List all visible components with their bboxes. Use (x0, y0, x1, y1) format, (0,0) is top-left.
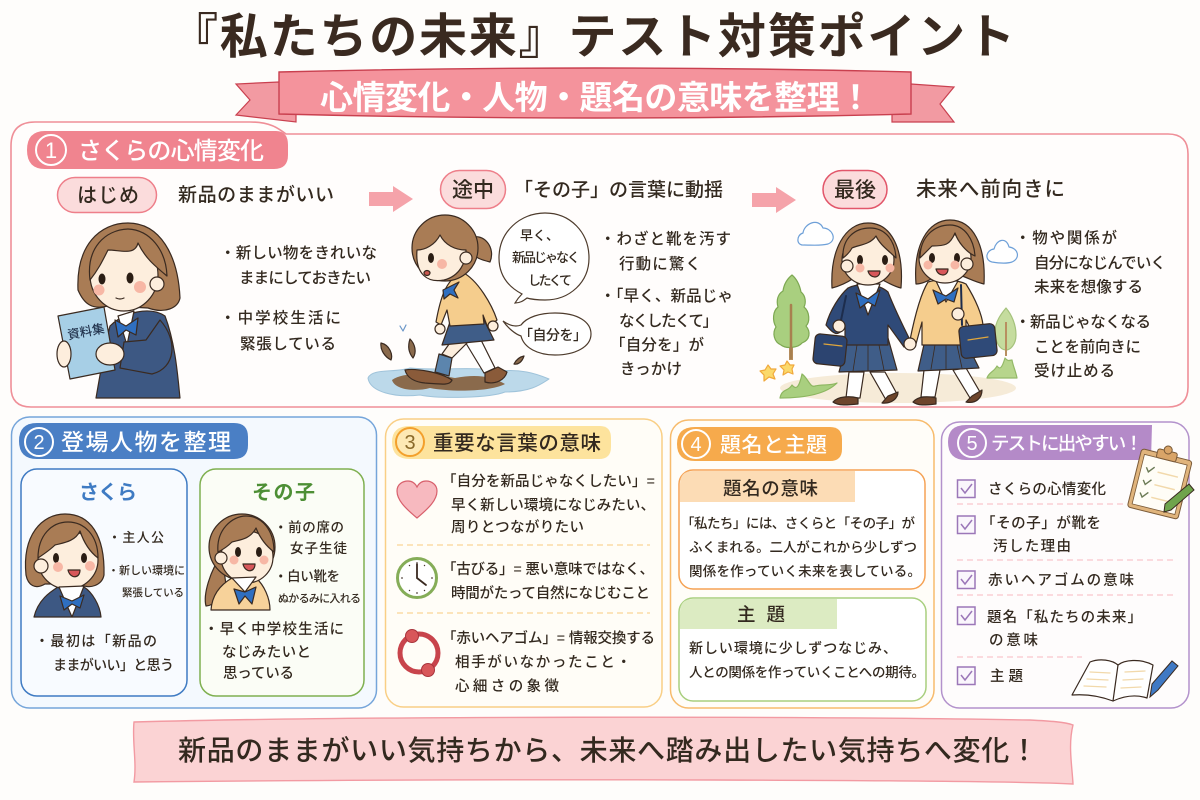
text: その子 details: ・白い靴を (274, 568, 340, 584)
section heading 2 (19, 423, 248, 459)
icon: blue pen (1150, 661, 1178, 697)
stage heading: 「その子」の言葉に動揺: 「その子」の言葉に動揺 (514, 179, 723, 201)
section heading 2: 2 (33, 432, 45, 454)
panel 3: 重要な言葉の意味 (386, 419, 662, 707)
speech bubble: 早く、新品じゃなくしたくて: 新品じゃなく (512, 250, 580, 265)
stage label: 最後 (823, 170, 887, 208)
item: 題名の意味 (958, 607, 1142, 649)
card: 題名の意味: 題名の意味 (723, 478, 818, 499)
card: さくら (21, 469, 187, 696)
icon: heart (397, 481, 437, 518)
banner: subtitle ribbon (236, 68, 954, 122)
section heading 5 (948, 425, 1152, 460)
text: 途中 bullets (600, 229, 733, 378)
text: 最後 bullets: ・物や関係が (1015, 228, 1117, 247)
text: 主題の説明 (689, 640, 925, 680)
text: さくら details: ・主人公 (108, 530, 164, 545)
text: 自分を新品じゃなくしたい: 早く新しい環境になじみたい、 (451, 497, 655, 514)
text: 自分を新品じゃなくしたい: 「自分を新品じゃなくしたい」= (442, 473, 655, 490)
text: 途中 bullets: ・「早く、新品じゃ (600, 287, 733, 305)
card: 主題: 主 題 (737, 604, 785, 625)
stage label: はじめ: はじめ (77, 185, 139, 207)
icon: green pencil (1164, 484, 1194, 512)
text: その子 details: ・早く中学校生活に (204, 621, 344, 638)
name: さくら: さくら (79, 481, 137, 504)
text: その子 details: 女子生徒 (290, 541, 348, 556)
stage label: はじめ (58, 178, 156, 212)
text: 赤いヘアゴム: 「赤いヘアゴム」= 情報交換する (442, 629, 655, 647)
section heading 3: 3 (404, 432, 416, 454)
stage heading: 新品のままがいい: 新品のままがいい (178, 184, 334, 206)
panel 4: 題名と主題 (670, 420, 934, 708)
panel 2: 登場人物を整理 (12, 417, 376, 708)
text: 自分を新品じゃなくしたい: 周りとつながりたい (451, 518, 584, 536)
banner: subtitle ribbon: 心情変化・人物・題名の意味を整理！ (320, 79, 872, 116)
text: さくら details: 緊張している (122, 587, 184, 599)
illustration: two girls walking with scenery (760, 220, 1017, 405)
title: 『私たちの未来』テスト対策ポイント (170, 11, 1015, 64)
text: 題名の説明: 関係を作っていく未来を表している。 (689, 563, 921, 579)
stage heading: 未来へ前向きに: 未来へ前向きに (916, 178, 1065, 201)
stage label: 途中 (440, 170, 506, 208)
text: その子 details: 思っている (223, 665, 294, 682)
header: 題名の意味 (680, 471, 855, 502)
stage label: 途中: 途中 (452, 179, 494, 202)
bag left (813, 333, 847, 367)
section heading 4 (677, 427, 842, 461)
stage label: 最後: 最後 (834, 179, 876, 202)
text: 赤いヘアゴム: 心細さの象徴 (455, 677, 560, 695)
text: 自分を新品じゃなくしたい (442, 473, 655, 536)
section heading 4: 題名と主題 (720, 434, 827, 457)
text: さくら details: ・新しい環境に (108, 564, 185, 577)
text: 主題の説明: 人との関係を作っていくことへの期待。 (689, 665, 925, 680)
text: 途中 bullets: ・わざと靴を汚す (600, 229, 731, 248)
callout: summary banner (134, 717, 1073, 784)
icon: clock (398, 558, 436, 598)
header: 主題 (680, 599, 837, 629)
text: 最後 bullets: ・新品じゃなくなる (1015, 313, 1151, 331)
card: 主題 (679, 598, 926, 701)
bag right (958, 323, 998, 359)
section heading 1: さくらの心情変化 (78, 138, 264, 165)
text: その子 details (204, 519, 361, 682)
text: 古びる (442, 561, 654, 602)
text: 題名の説明: ふくまれる。二人がこれから少しずつ (689, 539, 917, 555)
section heading 5: 5 (966, 433, 978, 455)
text: 途中 bullets: 「自分を」が (610, 335, 704, 354)
section heading 2: 登場人物を整理 (61, 429, 231, 455)
text: 途中 bullets: 行動に驚く (619, 255, 701, 273)
icon: red hair tie (400, 630, 438, 676)
speech bubble: 早く、新品じゃなくしたくて: したくて (528, 273, 572, 288)
text: さくら details: ままがいい」と思う (53, 657, 174, 673)
text: 最後 bullets: 自分になじんでいく (1034, 254, 1166, 272)
item: 赤いヘアゴムの意味: 赤いヘアゴムの意味 (988, 571, 1134, 589)
speech bubble: 「自分を」: 「自分を」 (519, 327, 587, 343)
illustration: さくら holding a book (57, 223, 180, 398)
section heading 5: テストに出やすい！ (991, 433, 1143, 454)
text: 途中 bullets: なくしたくて」 (619, 312, 718, 330)
item: 主題 (958, 667, 1024, 685)
section heading 1 (27, 131, 288, 169)
cloud right (987, 240, 1017, 263)
text: はじめ bullets (220, 244, 377, 353)
sleeve (120, 320, 172, 374)
card: その子 (200, 469, 364, 696)
text: さくら details (35, 530, 185, 673)
item: その子が靴を汚した理由: 汚した理由 (993, 538, 1071, 555)
speech bubble: 早く、新品じゃなくしたくて: 早く、 (520, 228, 559, 243)
section heading 1: 1 (45, 138, 57, 163)
text: その子 details: なじみたいと (222, 644, 311, 661)
text: 題名の説明 (681, 515, 921, 579)
item: その子が靴を汚した理由 (958, 514, 1101, 555)
item: その子が靴を汚した理由: 「その子」が靴を (981, 514, 1101, 532)
arrow: 途中 to 最後 (752, 187, 796, 213)
item: さくらの心情変化: さくらの心情変化 (988, 481, 1106, 498)
text: 古びる: 「古びる」= 悪い意味ではなく、 (442, 561, 654, 578)
item: 題名の意味: 題名「私たちの未来」 (987, 609, 1142, 626)
panel 5: テストに出やすい (942, 422, 1194, 708)
checklist (957, 480, 1175, 685)
text: はじめ bullets: ・新しい物をきれいな (220, 244, 377, 262)
section heading 4: 4 (690, 434, 702, 456)
cloud left (798, 222, 833, 245)
illustration: puddle and walking girl (368, 215, 549, 397)
section heading 3: 重要な言葉の意味 (433, 432, 601, 455)
text: 題名の説明: 「私たち」には、さくらと「その子」が (681, 515, 916, 531)
illustration: さくら holding a book: 資料集 (66, 320, 106, 342)
name: その子: その子 (252, 482, 315, 504)
speech bubble: 早く、新品じゃなくしたくて (499, 213, 589, 303)
girl left (blazer) (813, 223, 911, 405)
item: 主題: 主題 (990, 668, 1024, 685)
girl right (cardigan) (910, 220, 998, 405)
portrait: さくら (25, 514, 104, 617)
text: はじめ bullets: ままにしておきたい (239, 269, 371, 287)
arrow: はじめ to 途中 (369, 186, 413, 212)
text: その子 details: ぬかるみに入れる (278, 592, 361, 605)
text: 最後 bullets: 未来を想像する (1034, 278, 1143, 296)
panel 1: さくらの心情変化 (11, 122, 1188, 407)
item: 題名の意味: の意味 (989, 632, 1038, 649)
icon: clipboard with checks (1127, 440, 1194, 519)
icon: open book (1072, 660, 1153, 701)
text: 主題の説明: 新しい環境に少しずつなじみ、 (689, 640, 897, 656)
text: 赤いヘアゴム (442, 629, 655, 695)
text: 最後 bullets: ことを前向きに (1034, 338, 1141, 356)
text: 赤いヘアゴム: 相手がいなかったこと・ (455, 653, 631, 671)
text: はじめ bullets: ・中学校生活に (220, 309, 341, 327)
speech bubble: 「自分を」 (503, 313, 591, 355)
text: はじめ bullets: 緊張している (240, 335, 336, 353)
callout: summary banner: 新品のままがいい気持ちから、未来へ踏み出したい気持ちへ変化！ (178, 735, 1038, 766)
text: その子 details: ・前の席の (274, 519, 344, 535)
section heading 3 (392, 426, 611, 459)
text: 最後 bullets: 受け止める (1034, 361, 1115, 380)
text: 古びる: 時間がたって自然になじむこと (451, 584, 650, 602)
text: さくら details: ・最初は「新品の (35, 633, 157, 649)
card: 題名の意味 (679, 470, 925, 589)
text: 最後 bullets (1015, 228, 1166, 380)
portrait: その子 (205, 514, 275, 610)
flowers (760, 361, 794, 381)
text: 途中 bullets: きっかけ (620, 360, 682, 378)
